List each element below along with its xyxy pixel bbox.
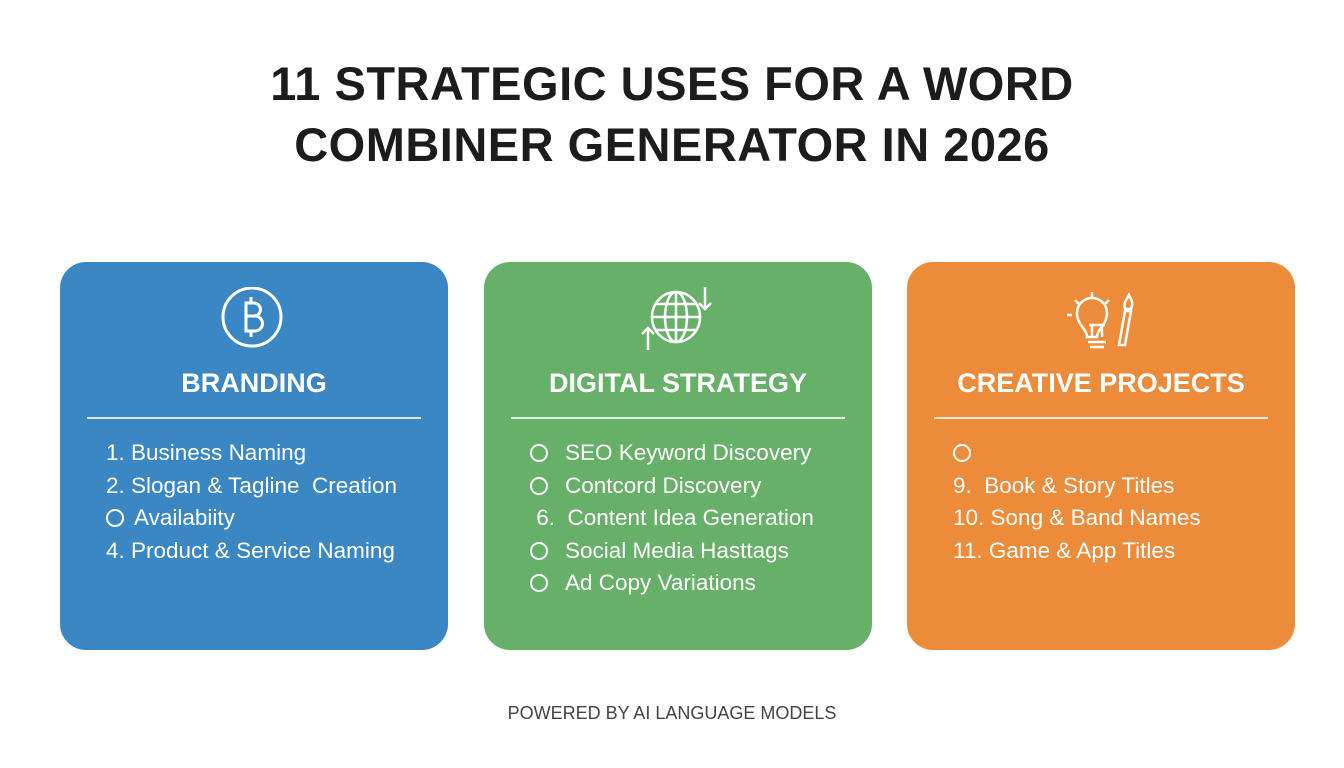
heading: DIGITAL STRATEGY: [549, 368, 807, 398]
list: Availabiity: [134, 505, 235, 530]
panel: branding: [60, 262, 448, 650]
heading: BRANDING: [181, 368, 327, 398]
list: [106, 440, 397, 562]
panel: creative projects: [907, 262, 1295, 650]
list: 4. Product & Service Naming: [106, 538, 395, 562]
list: 2. Slogan & Tagline Creation: [106, 472, 397, 498]
list: 6. Content Idea Generation: [536, 505, 814, 530]
icon: globe: [641, 287, 712, 350]
list: 9. Book & Story Titles: [953, 472, 1174, 498]
list: Social Media Hasttags: [565, 538, 789, 562]
list: [530, 440, 814, 595]
heading: CREATIVE PROJECTS: [957, 368, 1245, 398]
list: [953, 444, 1201, 562]
list: Contcord Discovery: [565, 472, 761, 498]
list: 1. Business Naming: [106, 440, 306, 465]
footer: POWERED BY AI LANGUAGE MODELS: [508, 703, 836, 723]
title: COMBINER GENERATOR IN 2026: [294, 118, 1050, 171]
list: SEO Keyword Discovery: [565, 440, 811, 465]
title: 11 STRATEGIC USES FOR A WORD: [270, 57, 1074, 110]
list: Ad Copy Variations: [565, 570, 756, 595]
panel: digital strategy: [484, 262, 872, 650]
icon: bulb and brush: [1067, 292, 1134, 348]
icon: coin: [222, 287, 282, 348]
list: 10. Song & Band Names: [953, 505, 1201, 530]
title: [270, 57, 1074, 171]
list: 11. Game & App Titles: [953, 538, 1175, 562]
